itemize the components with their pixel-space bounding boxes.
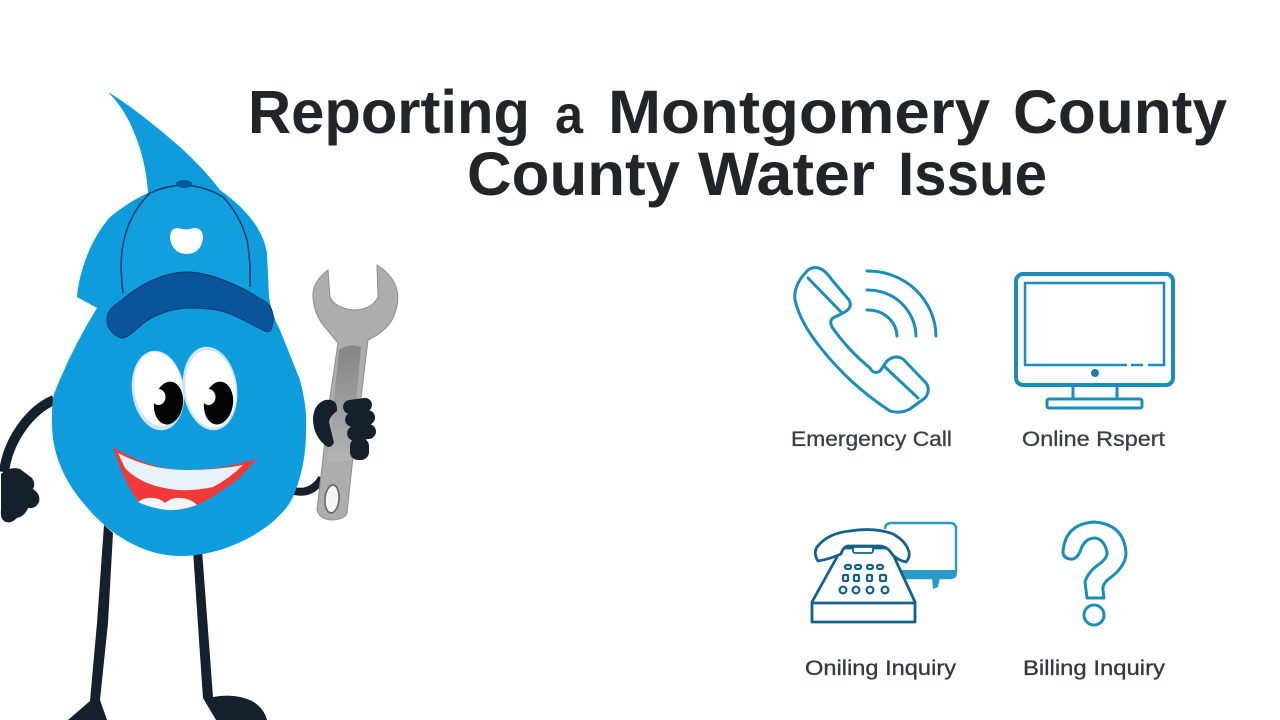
label: online report: Online Rspert — [1022, 428, 1165, 451]
icon: emergency call handset — [795, 268, 936, 412]
icon: question mark — [1063, 522, 1126, 625]
title: Water — [698, 140, 875, 208]
label: online inquiry: Oniling Inquiry — [805, 657, 957, 680]
mascot right hand — [313, 397, 377, 460]
icon: computer monitor — [1016, 274, 1173, 408]
label: billing inquiry: Billing Inquiry — [1023, 657, 1166, 680]
smile — [113, 447, 257, 510]
eyes — [127, 343, 243, 434]
title: Reporting — [248, 78, 530, 146]
mascot: water drop worker — [1, 92, 398, 720]
title: County — [467, 140, 680, 208]
icon: desk telephone with speech bubble — [812, 523, 956, 622]
title: County — [1013, 78, 1227, 146]
hat — [107, 180, 273, 338]
telephone — [812, 530, 915, 622]
mascot legs — [68, 525, 267, 720]
title: Issue — [898, 140, 1047, 208]
title — [248, 78, 1227, 208]
mascot left arm and hand — [1, 400, 54, 522]
label: emergency call: Emergency Call — [791, 428, 952, 451]
title: Montgomery — [608, 78, 990, 146]
wrench — [313, 265, 398, 520]
speech bubble — [885, 523, 956, 589]
mascot body and hat back — [52, 92, 306, 556]
title: a — [555, 85, 584, 145]
mascot right arm — [294, 478, 322, 492]
